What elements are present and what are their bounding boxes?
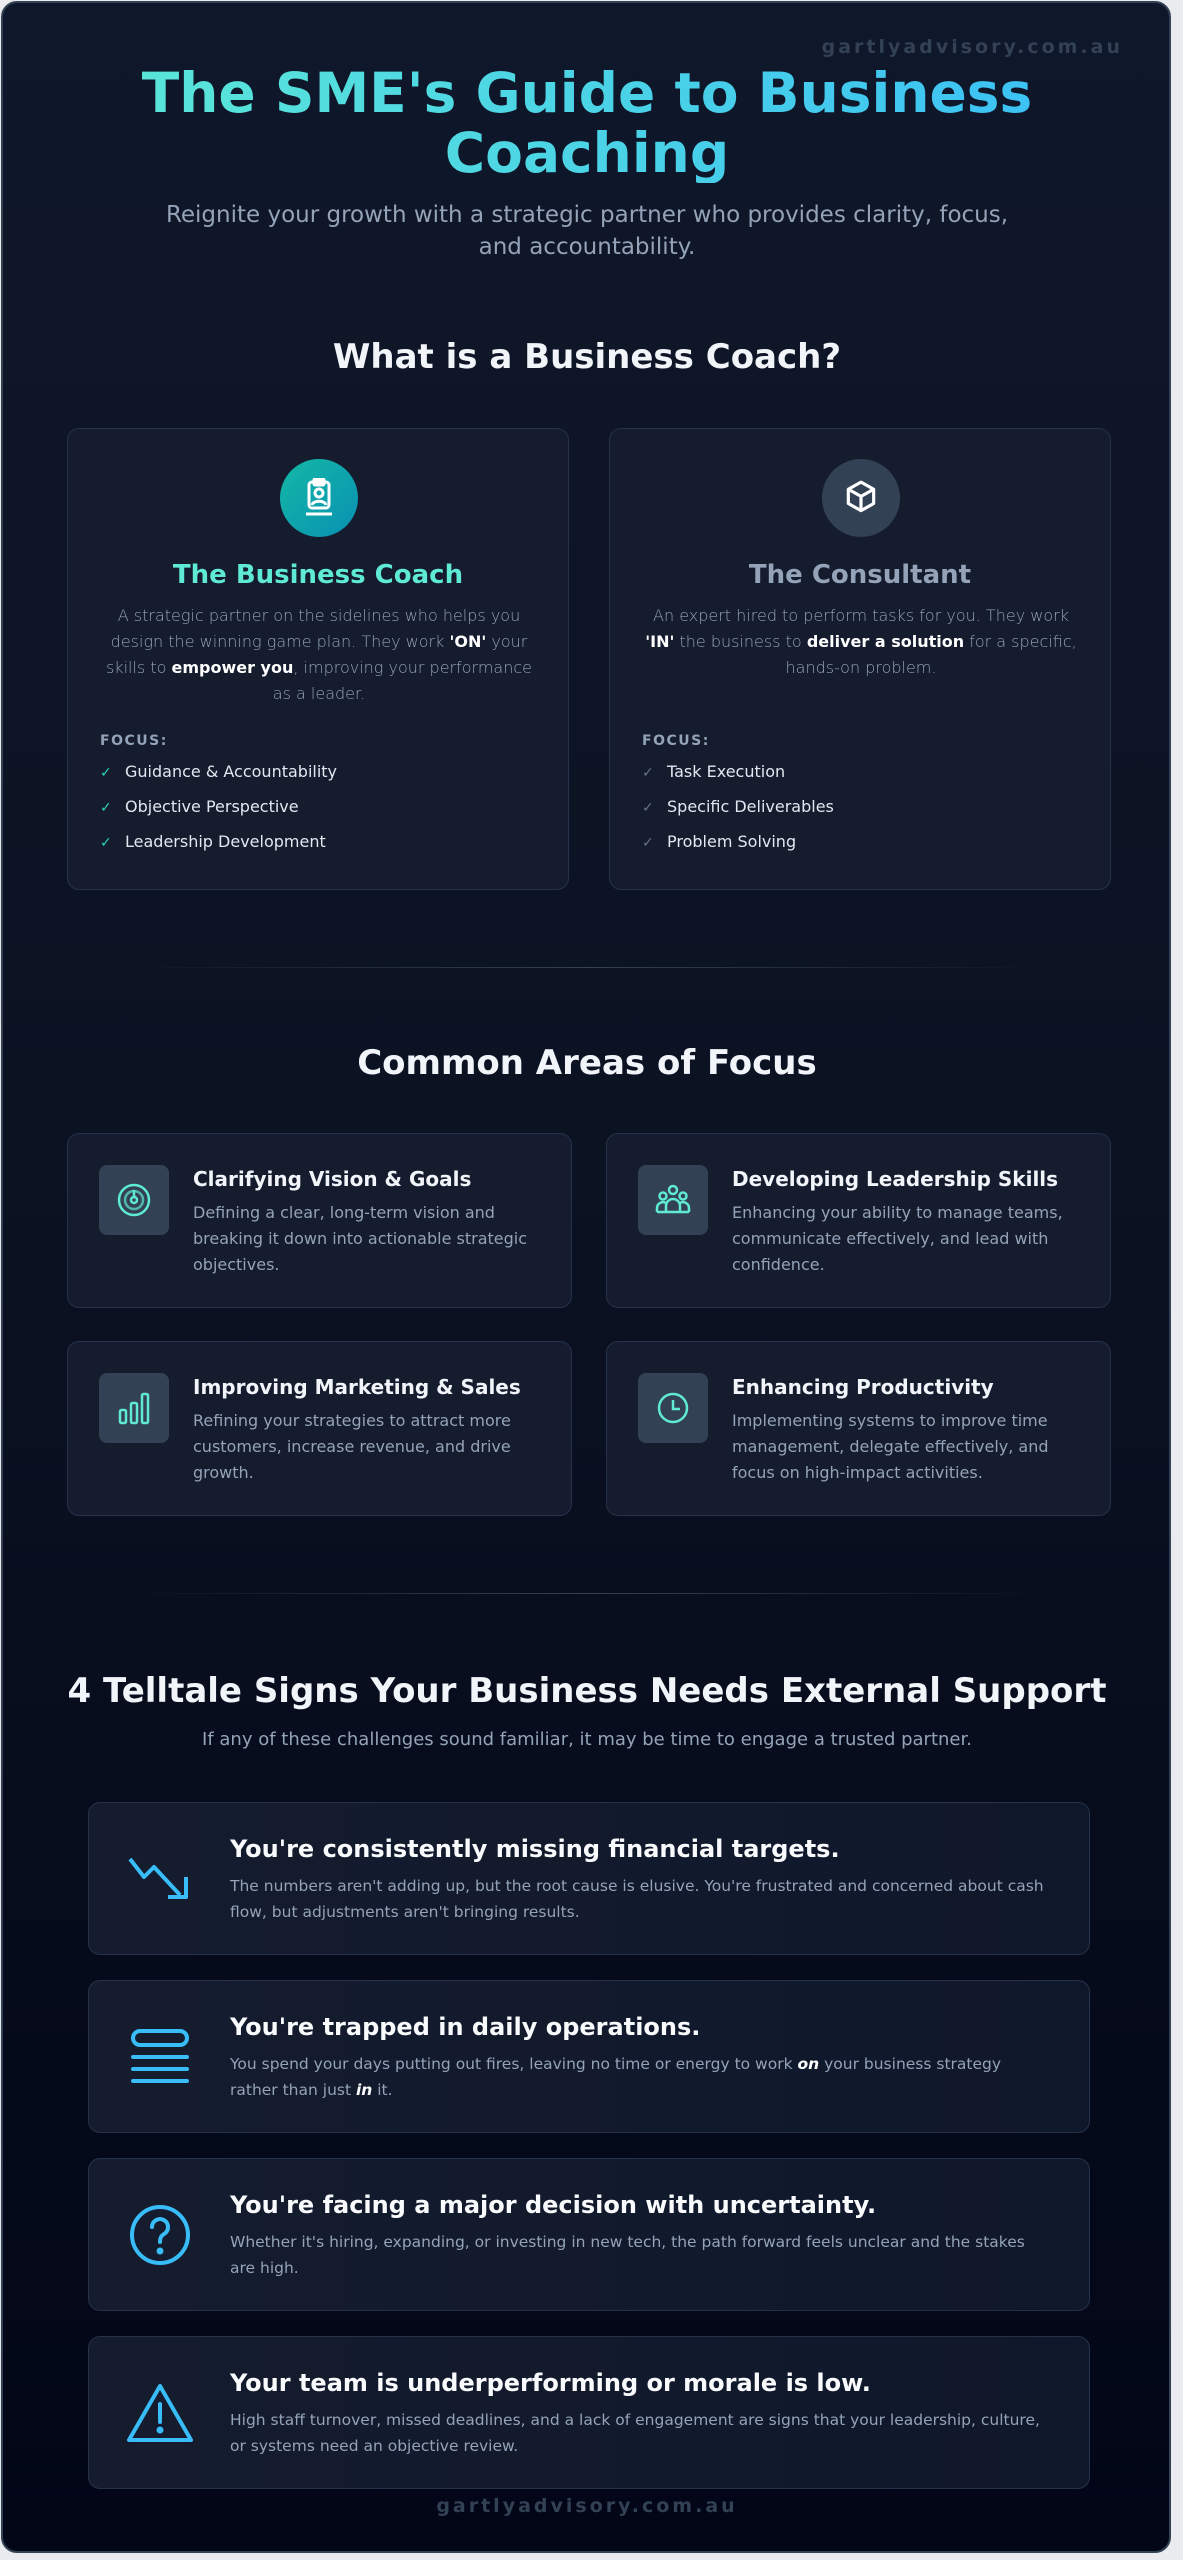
focus list: [642, 762, 834, 851]
text: Defining a clear, long-term vision and breaking it down into actionable strategic objectives.: [193, 1203, 527, 1274]
focus label: FOCUS:: [100, 733, 168, 749]
title: Your team is underperforming or morale is low.: [230, 2369, 871, 2397]
heading: telltale signs: 4 Telltale Signs Your Business Needs External Support: [68, 1671, 1106, 1711]
focus list: ✓: [100, 765, 112, 781]
title: You're trapped in daily operations.: [230, 2013, 700, 2041]
panel: leadership: [606, 1133, 1111, 1308]
subheading: If any of these challenges sound familiar, it may be time to engage a trusted partner.: [202, 1729, 972, 1750]
focus list: Objective Perspective: [125, 797, 299, 816]
title: Improving Marketing & Sales: [193, 1375, 521, 1399]
text: You spend your days putting out fires, leaving no time or energy to work on your business strategy rather than just in it.: [230, 2055, 1001, 2099]
panel: productivity: [606, 1341, 1111, 1516]
focus list: ✓: [642, 800, 654, 816]
icon: target: [99, 1165, 169, 1235]
title: You're facing a major decision with uncertainty.: [230, 2191, 876, 2219]
title: Enhancing Productivity: [732, 1375, 994, 1399]
sign card 2: [88, 1980, 1090, 2133]
panel: business coach: [67, 428, 569, 890]
sign card 4: [88, 2336, 1090, 2489]
icon: clock: [638, 1373, 708, 1443]
card title: The Business Coach: [173, 560, 463, 590]
focus list: ✓: [100, 835, 112, 851]
focus list: Specific Deliverables: [667, 797, 834, 816]
icon: trend down: [128, 1858, 188, 1899]
panel: marketing: [67, 1341, 572, 1516]
watermark top: gartlyadvisory.com.au: [822, 36, 1123, 58]
focus label: FOCUS:: [642, 733, 710, 749]
text: Implementing systems to improve time management, delegate effectively, and focus on high-impact activities.: [732, 1411, 1049, 1482]
focus list: Guidance & Accountability: [125, 762, 337, 781]
watermark bottom: gartlyadvisory.com.au: [436, 2495, 738, 2517]
heading: common areas: Common Areas of Focus: [357, 1043, 817, 1083]
panel: consultant: [609, 428, 1111, 890]
focus list: Task Execution: [667, 762, 785, 781]
focus list: Problem Solving: [667, 832, 796, 851]
icon: people: [638, 1165, 708, 1235]
title: [3, 63, 1171, 183]
title: You're consistently missing financial targets.: [230, 1835, 840, 1863]
focus list: ✓: [642, 835, 654, 851]
text: High staff turnover, missed deadlines, and a lack of engagement are signs that your leadership, culture, or systems need an objective review.: [230, 2411, 1040, 2455]
sign card 1: [88, 1802, 1090, 1955]
icon: bar chart: [99, 1373, 169, 1443]
text: Whether it's hiring, expanding, or investing in new tech, the path forward feels unclear and the stakes are high.: [230, 2233, 1025, 2277]
title: Developing Leadership Skills: [732, 1167, 1058, 1191]
title: Clarifying Vision & Goals: [193, 1167, 471, 1191]
icon: cube: [822, 459, 900, 537]
description: An expert hired to perform tasks for you. They work 'IN' the business to deliver a solution for a specific, hands-on problem.: [645, 606, 1077, 677]
subtitle: Reignite your growth with a strategic partner who provides clarity, focus, and accountability.: [166, 202, 1008, 260]
icon: list: [131, 2029, 189, 2083]
icon: warning: [126, 2384, 193, 2442]
focus list: ✓: [642, 765, 654, 781]
description: A strategic partner on the sidelines who helps you design the winning game plan. They work 'ON' your skills to empower you, improving your performance as a leader.: [106, 606, 532, 703]
heading: what is a business coach: What is a Business Coach?: [333, 337, 841, 377]
text: The numbers aren't adding up, but the root cause is elusive. You're frustrated and concerned about cash flow, but adjustments aren't bringing results.: [230, 1877, 1044, 1921]
title: The SME's Guide to Business: [142, 61, 1032, 125]
focus list: Leadership Development: [125, 832, 326, 851]
focus list: ✓: [100, 800, 112, 816]
panel: vision: [67, 1133, 572, 1308]
card title: The Consultant: [749, 560, 971, 590]
icon: question: [130, 2205, 190, 2265]
text: Enhancing your ability to manage teams, communicate effectively, and lead with confidence.: [732, 1203, 1063, 1274]
sign card 3: [88, 2158, 1090, 2311]
icon: coach badge: [280, 459, 358, 537]
title: Coaching: [445, 121, 729, 185]
focus list: [100, 762, 337, 851]
text: Refining your strategies to attract more customers, increase revenue, and drive growth.: [193, 1411, 511, 1482]
